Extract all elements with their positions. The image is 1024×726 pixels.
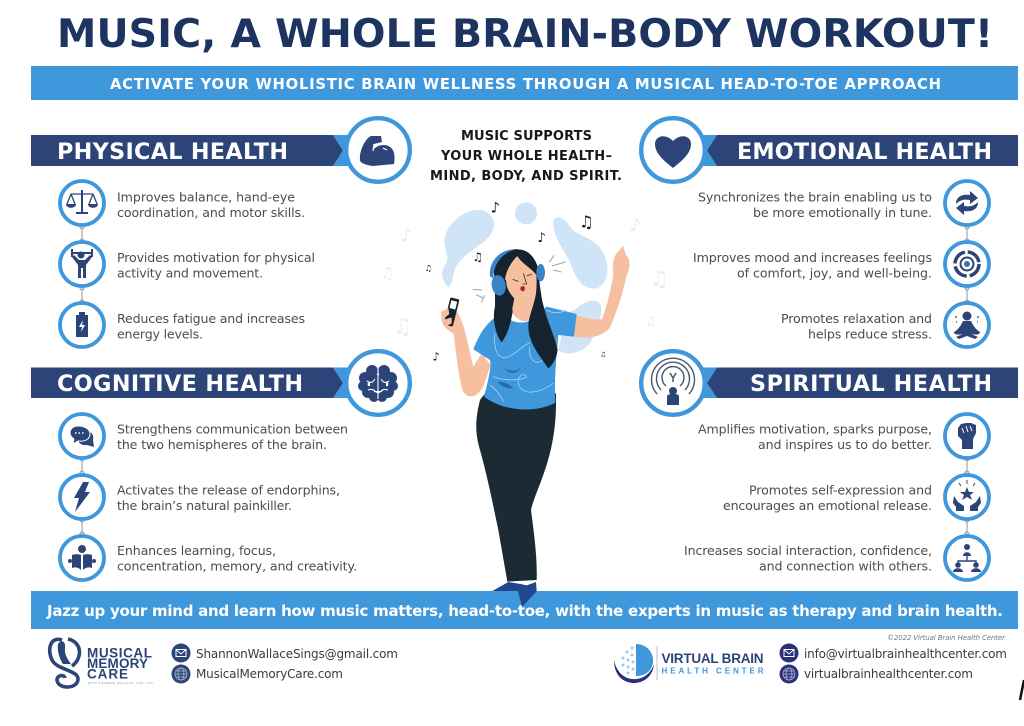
closed eyes and nose bbox=[513, 273, 532, 284]
neck and face bbox=[512, 290, 537, 321]
connectors bbox=[80, 457, 84, 536]
contact: Musical Memory Care: ShannonWallaceSings@gmail.com bbox=[196, 647, 398, 661]
contact: Virtual Brain Health Center: virtualbrainhealthcenter.com bbox=[804, 667, 973, 681]
heading bar bbox=[698, 368, 1018, 398]
text: communication: Strengthens communication between bbox=[117, 422, 348, 436]
subtitle banner bbox=[31, 66, 1018, 100]
text: balance bbox=[117, 190, 305, 220]
trousers bbox=[476, 393, 556, 582]
panel: physical health bbox=[31, 118, 410, 347]
center statement bbox=[430, 129, 622, 184]
icon: battery bbox=[60, 303, 104, 347]
heading bar: PHYSICAL HEALTH bbox=[57, 139, 288, 165]
text: social: and connection with others. bbox=[759, 558, 932, 574]
icon: lightning bolt bbox=[60, 475, 104, 519]
phone bbox=[444, 297, 460, 327]
text: relaxation bbox=[781, 311, 932, 342]
right hair lock bbox=[528, 260, 558, 368]
panel: emotional health bbox=[641, 118, 1018, 347]
title: MUSIC, A WHOLE BRAIN-BODY WORKOUT! bbox=[57, 11, 993, 57]
dark notes: ♪ bbox=[537, 231, 546, 246]
panel: spiritual health bbox=[641, 351, 1018, 580]
text: communication: the two hemispheres of the brain. bbox=[117, 437, 327, 452]
dark notes: ♫ bbox=[425, 263, 432, 273]
icon: meditation bbox=[945, 303, 989, 347]
text: endorphins bbox=[117, 482, 340, 513]
faint notes bbox=[380, 215, 668, 339]
back hair bbox=[494, 249, 540, 313]
logo: Virtual Brain Health Center bbox=[614, 644, 764, 683]
panel: cognitive health bbox=[31, 351, 410, 580]
icon: radiating person bbox=[641, 351, 705, 415]
text: amplifies bbox=[698, 422, 932, 452]
illustration: woman listening to music bbox=[380, 200, 668, 410]
text: motivation bbox=[117, 250, 315, 280]
dark notes: ♫ bbox=[600, 350, 606, 358]
text: learning bbox=[117, 543, 357, 574]
faint notes: ♫ bbox=[645, 314, 656, 329]
headphones bbox=[490, 249, 545, 297]
text: self-expression bbox=[723, 482, 932, 513]
mouth bbox=[520, 286, 525, 291]
text: relaxation: helps reduce stress. bbox=[808, 326, 932, 342]
text: amplifies: and inspires us to do better. bbox=[758, 437, 932, 452]
faint notes: ♫ bbox=[393, 314, 412, 339]
heading bar bbox=[698, 135, 1018, 166]
text: amplifies: Amplifies motivation, sparks purpose, bbox=[698, 422, 932, 436]
text: energy: energy levels. bbox=[117, 326, 203, 342]
text: endorphins: Activates the release of endorphins, bbox=[117, 482, 340, 498]
icon: balance scale bbox=[60, 181, 104, 225]
shirt bbox=[473, 307, 577, 410]
text: self-expression: Promotes self-expression and bbox=[749, 482, 932, 498]
text: energy bbox=[117, 311, 305, 342]
logo: Musical Memory Care bbox=[50, 639, 153, 687]
faint notes: ♫ bbox=[380, 263, 394, 282]
right arm bbox=[574, 246, 630, 338]
dark notes: ♪ bbox=[491, 200, 500, 217]
logo: Musical Memory Care: CARE bbox=[87, 666, 128, 682]
dark notes: ♪ bbox=[432, 349, 440, 363]
text: learning: Enhances learning, focus, bbox=[117, 543, 276, 558]
dark notes: ♫ bbox=[579, 212, 594, 231]
icon: heart bbox=[641, 118, 705, 182]
edge mark bbox=[1020, 680, 1024, 700]
icon: email bbox=[780, 644, 798, 662]
logo: Musical Memory Care: MUSICAL bbox=[87, 646, 152, 660]
icon: social network bbox=[945, 536, 989, 580]
contact: Musical Memory Care: MusicalMemoryCare.com bbox=[196, 667, 343, 681]
text: mood: of comfort, joy, and well-being. bbox=[737, 266, 932, 280]
faint notes: ♪ bbox=[628, 215, 643, 237]
heading bar bbox=[31, 368, 352, 398]
icon: sync arrows bbox=[945, 181, 989, 225]
icon: speech bubbles bbox=[60, 414, 104, 458]
icon: raised fist bbox=[945, 414, 989, 458]
contact: Virtual Brain Health Center bbox=[780, 644, 1007, 684]
contact: Musical Memory Care bbox=[172, 644, 398, 684]
icon: flexed bicep bbox=[346, 118, 410, 182]
logo: Virtual Brain Health Center: VIRTUAL BRAIN bbox=[662, 651, 764, 666]
shirt details bbox=[490, 310, 567, 402]
text: learning: concentration, memory, and creativity. bbox=[117, 558, 357, 574]
copyright: ©2022 Virtual Brain Health Center bbox=[887, 634, 1006, 642]
text: social bbox=[684, 543, 932, 574]
heading bar: SPIRITUAL HEALTH bbox=[750, 371, 992, 397]
contact: Virtual Brain Health Center: info@virtualbrainhealthcenter.com bbox=[804, 647, 1007, 661]
illustration: legs bbox=[476, 393, 556, 607]
icon: globe bbox=[780, 664, 798, 684]
center statement: YOUR WHOLE HEALTH– bbox=[440, 149, 612, 164]
text: synchronizes: be more emotionally in tune. bbox=[753, 205, 932, 220]
subtitle banner: ACTIVATE YOUR WHOLISTIC BRAIN WELLNESS THROUGH A MUSICAL HEAD-TO-TOE APPROACH bbox=[110, 76, 941, 93]
heading bar: EMOTIONAL HEALTH bbox=[737, 139, 992, 165]
icon: person reading bbox=[60, 536, 104, 580]
connectors bbox=[80, 225, 84, 304]
heading bar bbox=[31, 135, 352, 166]
shoes bbox=[492, 582, 537, 607]
connectors bbox=[965, 225, 969, 304]
faint notes: ♪ bbox=[401, 226, 412, 247]
icon: target bbox=[945, 242, 989, 286]
text: mood bbox=[693, 250, 932, 280]
logo: Virtual Brain Health Center: HEALTH CENTER bbox=[662, 666, 764, 676]
text: communication bbox=[117, 422, 348, 452]
left hair lock bbox=[494, 277, 513, 342]
icon: globe bbox=[172, 664, 190, 684]
heading bar: COGNITIVE HEALTH bbox=[57, 371, 303, 397]
top hair bbox=[496, 249, 539, 280]
text: endorphins: the brain’s natural painkiller. bbox=[117, 498, 292, 513]
text: synchronizes: Synchronizes the brain enabling us to bbox=[698, 190, 932, 204]
text: synchronizes bbox=[698, 190, 932, 220]
text: balance: coordination, and motor skills. bbox=[117, 205, 305, 220]
faint notes: ♫ bbox=[649, 267, 668, 292]
icon: weightlifter bbox=[60, 242, 104, 286]
text: social: Increases social interaction, confidence, bbox=[684, 543, 932, 558]
background blobs bbox=[442, 202, 607, 353]
logo: Musical Memory Care: MEMORY bbox=[87, 656, 148, 671]
logo: Musical Memory Care: WITH SHANNON WALLACE, CDP, CDC bbox=[88, 681, 153, 685]
icon: star in hands bbox=[945, 475, 989, 519]
text: motivation: activity and movement. bbox=[117, 266, 263, 280]
fingers bbox=[441, 308, 452, 327]
icon: email bbox=[172, 644, 190, 662]
text: relaxation: Promotes relaxation and bbox=[781, 311, 932, 326]
text: energy: Reduces fatigue and increases bbox=[117, 311, 305, 326]
icon: brain bbox=[346, 351, 410, 415]
dark notes: ♫ bbox=[472, 250, 483, 264]
left arm bbox=[441, 312, 491, 396]
text: motivation: Provides motivation for physical bbox=[117, 250, 315, 265]
text: balance: Improves balance, hand-eye bbox=[117, 190, 295, 204]
dark notes bbox=[425, 200, 606, 363]
sound lines bbox=[473, 255, 565, 303]
center statement: MIND, BODY, AND SPIRIT. bbox=[430, 169, 622, 184]
text: self-expression: encourages an emotional release. bbox=[723, 498, 932, 513]
text: mood: Improves mood and increases feelings bbox=[693, 250, 932, 265]
bottom banner: Jazz up your mind and learn how music matters, head-to-toe, with the experts in music as therapy and brain health. bbox=[46, 602, 1003, 620]
center statement: MUSIC SUPPORTS bbox=[461, 129, 592, 144]
connectors bbox=[965, 457, 969, 536]
bottom banner bbox=[31, 591, 1018, 629]
